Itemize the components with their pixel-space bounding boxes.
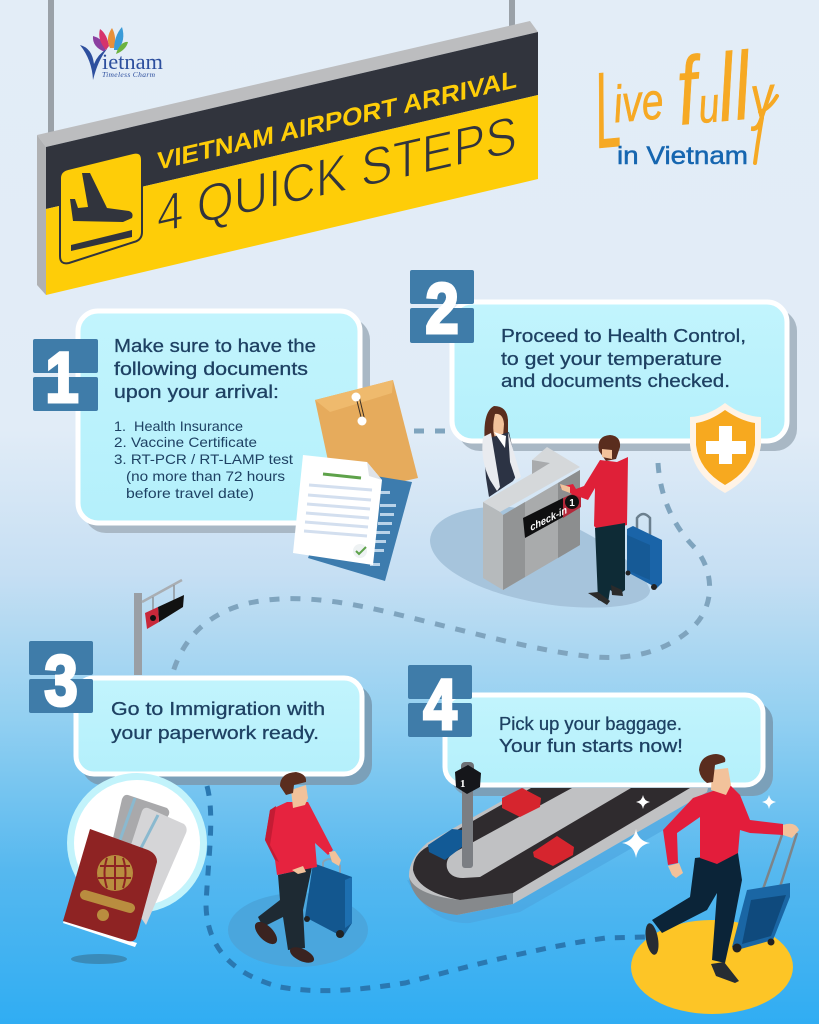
illustration: baggage carousel [407, 788, 725, 923]
step 2 text [501, 326, 746, 391]
slogan: Live fully in Vietnam: ive [611, 70, 676, 134]
step 1 document list [114, 418, 293, 501]
receptionist [482, 406, 521, 497]
red suitcase [533, 836, 574, 866]
step 1 heading text [114, 336, 316, 402]
step 1 heading text: upon your arrival: [114, 382, 279, 402]
yellow spot [631, 920, 793, 1014]
logo: Vietnam Timeless Charm: Timeless Charm [102, 70, 156, 79]
illustration: traveller walking with suitcase [228, 772, 368, 967]
red suitcase [502, 788, 541, 817]
slogan: Live fully in Vietnam: ully [696, 32, 776, 141]
dashed path: steps 3 to 4 [206, 786, 645, 991]
step 3 badge: 3 [44, 640, 78, 720]
illustration: passport and boarding passes [63, 773, 207, 964]
step 4 text: Your fun starts now! [499, 736, 683, 756]
step 2 text: Proceed to Health Control, [501, 326, 746, 346]
step 1 document list: (no more than 72 hours [126, 468, 285, 484]
counter: 1 [569, 498, 575, 509]
icon: airplane landing [60, 153, 142, 263]
illustration: check-in desk [430, 406, 662, 608]
carousel post with number marker [455, 762, 481, 868]
step 2 text: and documents checked. [501, 371, 730, 391]
panel: step 4 [408, 664, 763, 785]
blue suitcase [428, 829, 462, 860]
step 2 badge [410, 268, 474, 348]
dashed path: steps 2 to 3 [173, 463, 710, 672]
traveller at desk [560, 435, 628, 605]
step 1 document list: 1. Health Insurance [114, 418, 243, 434]
suitcase [304, 859, 352, 938]
illustration: traveller running with suitcase [643, 754, 799, 983]
step 3 badge [29, 640, 93, 720]
sign title: VIETNAM AIRPORT ARRIVAL [157, 65, 517, 176]
step 2 badge: 2 [425, 268, 459, 348]
counter [483, 447, 581, 590]
step 3 text [111, 699, 325, 743]
step 4 text [499, 714, 683, 756]
panel 4 drop shadow [451, 702, 773, 796]
step 3 text: Go to Immigration with [111, 699, 325, 719]
icon: health shield [690, 403, 761, 493]
counter: check-in [529, 505, 568, 534]
sparkles [622, 795, 776, 858]
panel: step 3 [29, 640, 372, 785]
step 1 document list: 2. Vaccine Certificate [114, 434, 257, 450]
sign subtitle: 4 QUICK STEPS [157, 105, 517, 245]
illustration: direction sign post [134, 580, 184, 675]
step 4 badge: 4 [423, 664, 457, 744]
step 1 document list: 3. RT-PCR / RT-LAMP test [114, 451, 293, 467]
step 1 heading text: Make sure to have the [114, 336, 316, 356]
slogan: Live fully in Vietnam: f [672, 36, 708, 145]
step 1 badge [33, 337, 98, 417]
step 1 document list: before travel date) [126, 485, 254, 501]
slogan: Live fully in Vietnam: in Vietnam [617, 142, 748, 170]
icon: envelope and documents [293, 380, 418, 581]
slogan: Live fully in Vietnam [589, 29, 781, 172]
step 4 badge [408, 664, 472, 744]
suitcase [626, 514, 662, 590]
dashed path: steps 1 to 2 [414, 428, 446, 434]
step 2 text: to get your temperature [501, 349, 722, 369]
slogan: Live fully in Vietnam: L [590, 50, 625, 172]
step 4 text: Pick up your baggage. [499, 714, 682, 734]
suitcase [732, 832, 797, 952]
carousel post with number marker: 1 [460, 778, 466, 790]
hanging sign: 4 quick steps [37, 0, 538, 295]
step 1 badge: 1 [45, 337, 79, 417]
panel: step 1 [33, 311, 370, 533]
step 1 heading text: following documents [114, 359, 308, 379]
panel: step 2 [410, 268, 797, 451]
logo: Vietnam Timeless Charm: ietnam [102, 49, 163, 74]
logo: Vietnam Timeless Charm [80, 27, 163, 80]
step 3 text: your paperwork ready. [111, 723, 319, 743]
